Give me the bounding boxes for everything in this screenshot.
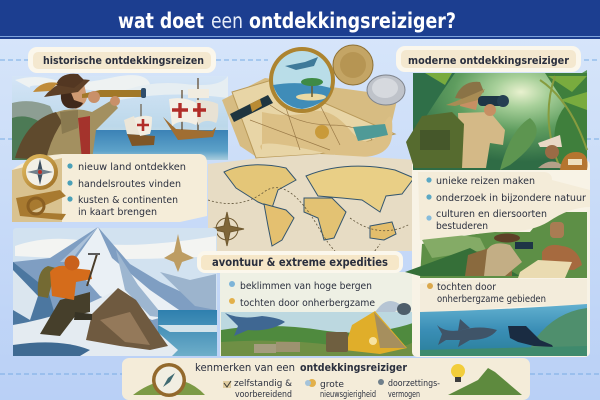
heading: ontdekkingsreiziger xyxy=(300,362,408,374)
icon: tent xyxy=(326,311,407,354)
avontuur list: beklimmen van hoge bergen xyxy=(240,281,372,292)
label: historische ontdekkingsreizen: historische ontdekkingsreizen xyxy=(43,54,204,67)
heading: kenmerken van een xyxy=(195,362,295,374)
item: zelfstandig: zelfstandig & xyxy=(234,379,292,389)
label: moderne ontdekkingsreiziger: moderne ontdekkingsreiziger xyxy=(408,54,570,67)
label: historische ontdekkingsreizen xyxy=(28,47,216,73)
panel: historische list xyxy=(12,154,207,222)
icon: small ship xyxy=(124,104,155,146)
panel: avontuur xyxy=(220,272,416,356)
list text: kusten & continenten xyxy=(78,195,178,206)
icon: coins xyxy=(333,45,405,105)
list text: handelsroutes vinden xyxy=(78,179,181,190)
modern list: onderzoek in bijzondere natuur xyxy=(436,193,586,204)
title xyxy=(118,9,456,33)
header band xyxy=(0,0,600,39)
modern list: culturen en diersoorten xyxy=(436,209,547,220)
second jungle scene xyxy=(405,212,587,278)
jungle scene xyxy=(406,70,588,170)
panel: historische scene xyxy=(12,74,228,160)
heading xyxy=(195,362,408,374)
icon: hanging gear xyxy=(397,303,411,315)
icon: light bulb xyxy=(451,364,465,382)
icon: diver xyxy=(508,326,553,347)
icon: shark xyxy=(225,313,285,336)
figure: tribesman and tiger xyxy=(538,135,588,170)
item: doorzettingsvermogen xyxy=(378,379,440,400)
item: nieuwsgierigheid: nieuwsgierigheid xyxy=(320,390,376,400)
icon: map compass rose xyxy=(210,212,244,246)
avontuur list xyxy=(229,281,375,309)
icon: compass xyxy=(22,154,58,190)
icon: compass rose xyxy=(164,234,194,272)
panel: moderne xyxy=(405,70,590,357)
panel: kenmerken xyxy=(122,358,530,400)
item: doorzettingsvermogen: doorzettings- xyxy=(388,379,440,389)
item: zelfstandig xyxy=(223,379,292,400)
icon: compass on island xyxy=(133,363,205,397)
avontuur list: tochten door onherbergzame xyxy=(240,298,375,309)
label: avontuur & extreme expedities xyxy=(197,251,403,273)
modern list xyxy=(426,176,586,232)
lower list box: tochten door xyxy=(437,282,496,293)
item: doorzettingsvermogen: vermogen xyxy=(388,390,420,400)
underwater scene xyxy=(420,304,587,356)
figure: climber xyxy=(38,254,100,336)
illustration: world map xyxy=(208,154,418,262)
title: een xyxy=(211,9,243,33)
title: wat doet xyxy=(118,9,204,33)
modern list: bestuderen xyxy=(436,221,488,232)
list box xyxy=(418,172,590,240)
icon: shark xyxy=(437,325,497,347)
lower list box xyxy=(420,279,587,312)
figure: explorer with spyglass xyxy=(15,74,146,160)
title: ontdekkingsreiziger? xyxy=(249,9,456,33)
illustration: map sheets xyxy=(222,45,405,160)
list text: nieuw land ontdekken xyxy=(78,162,186,173)
item: nieuwsgierigheid: grote xyxy=(320,380,344,390)
item: nieuwsgierigheid xyxy=(305,379,376,400)
list text: in kaart brengen xyxy=(78,207,157,218)
icon: large ship xyxy=(163,78,218,140)
icon: magnifier xyxy=(230,47,335,122)
avontuur scene xyxy=(221,301,416,356)
modern list: unieke reizen maken xyxy=(436,176,535,187)
lower list box: onherbergzame gebieden xyxy=(437,294,546,305)
item: zelfstandig: voorbereidend xyxy=(235,390,292,400)
figure: modern explorer xyxy=(406,82,509,168)
label: moderne ontdekkingsreiziger xyxy=(396,46,581,72)
icon: green hill xyxy=(448,368,522,395)
label: avontuur & extreme expedities: avontuur & extreme expedities xyxy=(212,255,388,269)
icon: navigation tools xyxy=(16,190,66,220)
illustration: mountain climber xyxy=(13,227,217,356)
list text xyxy=(67,162,186,218)
